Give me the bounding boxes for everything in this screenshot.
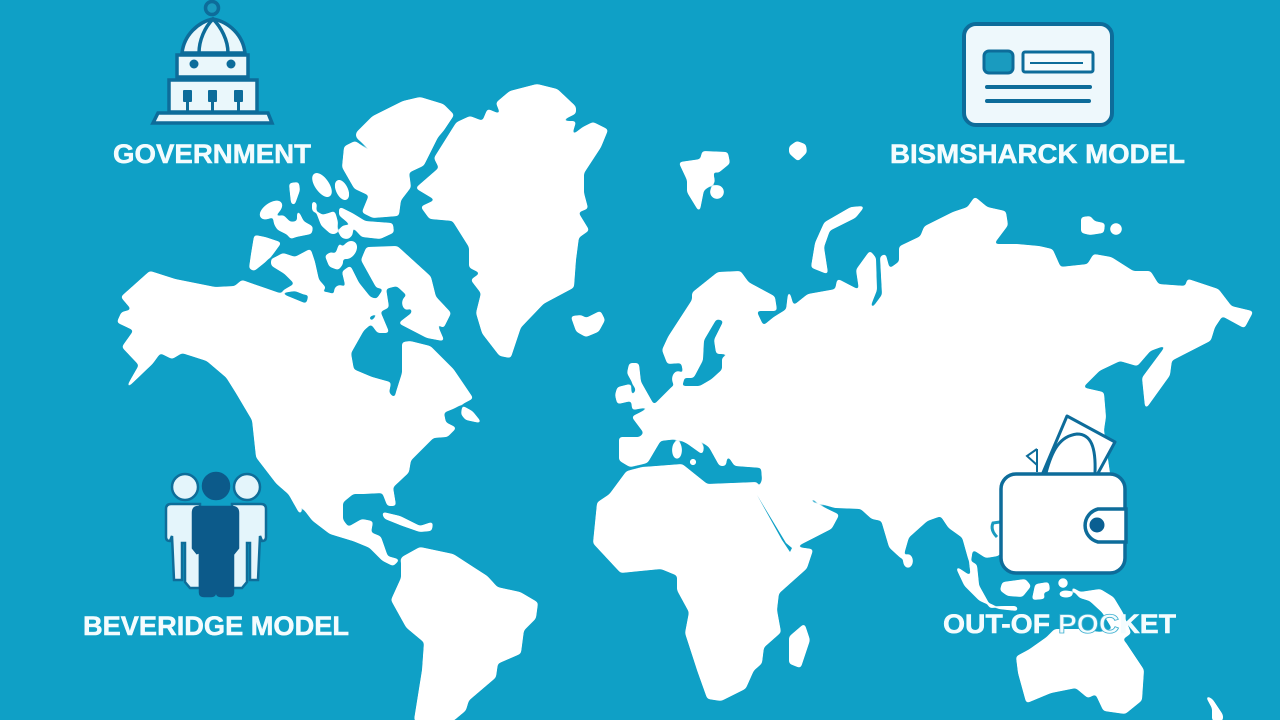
drum bbox=[177, 55, 248, 77]
Baffin Island bbox=[362, 247, 450, 340]
icon: group of people bbox=[166, 473, 266, 596]
Novaya Zemlya bbox=[812, 207, 863, 273]
Africa bbox=[594, 465, 812, 700]
Greenland bbox=[417, 85, 607, 357]
Iceland bbox=[572, 312, 604, 336]
Arctic islands bbox=[250, 171, 411, 309]
Sulawesi bbox=[1033, 583, 1049, 599]
Ireland bbox=[616, 385, 631, 403]
New Zealand bbox=[1207, 697, 1222, 720]
label: Government: GOVERNMENT bbox=[113, 139, 312, 169]
Great Britain bbox=[628, 364, 653, 409]
Baja California bbox=[287, 488, 301, 513]
dome finial bbox=[206, 2, 218, 14]
dome bbox=[182, 19, 245, 53]
centre person bbox=[193, 473, 238, 596]
Sumatra bbox=[957, 568, 1017, 610]
label: Bismarck model: BISMSHARCK MODEL bbox=[890, 139, 1185, 169]
small islands bbox=[1059, 579, 1072, 596]
icon: wallet with cash bbox=[992, 416, 1126, 573]
Arctic islet bbox=[790, 142, 806, 160]
coast notch bbox=[992, 522, 1000, 537]
wallet body bbox=[1001, 474, 1125, 573]
Mediterranean islet bbox=[690, 460, 696, 464]
left person bbox=[166, 474, 200, 588]
label: Out-of-pocket: OUT-OF POCKET bbox=[943, 609, 1177, 639]
world map bbox=[118, 85, 1252, 720]
clasp bbox=[1085, 509, 1126, 542]
Australia bbox=[1017, 630, 1143, 713]
South America bbox=[392, 548, 537, 720]
banknote bbox=[1042, 416, 1115, 475]
New Siberian Islands bbox=[1082, 217, 1121, 234]
Denmark island bbox=[673, 372, 683, 386]
Madagascar bbox=[790, 625, 809, 667]
Yamal peninsula bbox=[857, 252, 876, 305]
North America bbox=[118, 267, 472, 565]
icon: government capitol building bbox=[153, 2, 272, 123]
Ellesmere Island bbox=[343, 98, 453, 217]
main building bbox=[169, 80, 257, 112]
New Guinea bbox=[1072, 588, 1130, 640]
plinth bbox=[153, 113, 272, 123]
Svalbard bbox=[680, 152, 729, 210]
Borneo bbox=[1001, 580, 1030, 596]
icon: insurance card bbox=[964, 24, 1112, 125]
Sardinia bbox=[673, 442, 681, 458]
Eurasia bbox=[620, 198, 1252, 562]
right person bbox=[232, 474, 266, 588]
Cuba bbox=[383, 513, 432, 531]
Malay peninsula bbox=[970, 562, 978, 584]
label: Beveridge model: BEVERIDGE MODEL bbox=[83, 611, 349, 641]
Sri Lanka bbox=[904, 555, 912, 567]
Newfoundland bbox=[462, 407, 480, 422]
Red Sea bbox=[757, 495, 792, 552]
